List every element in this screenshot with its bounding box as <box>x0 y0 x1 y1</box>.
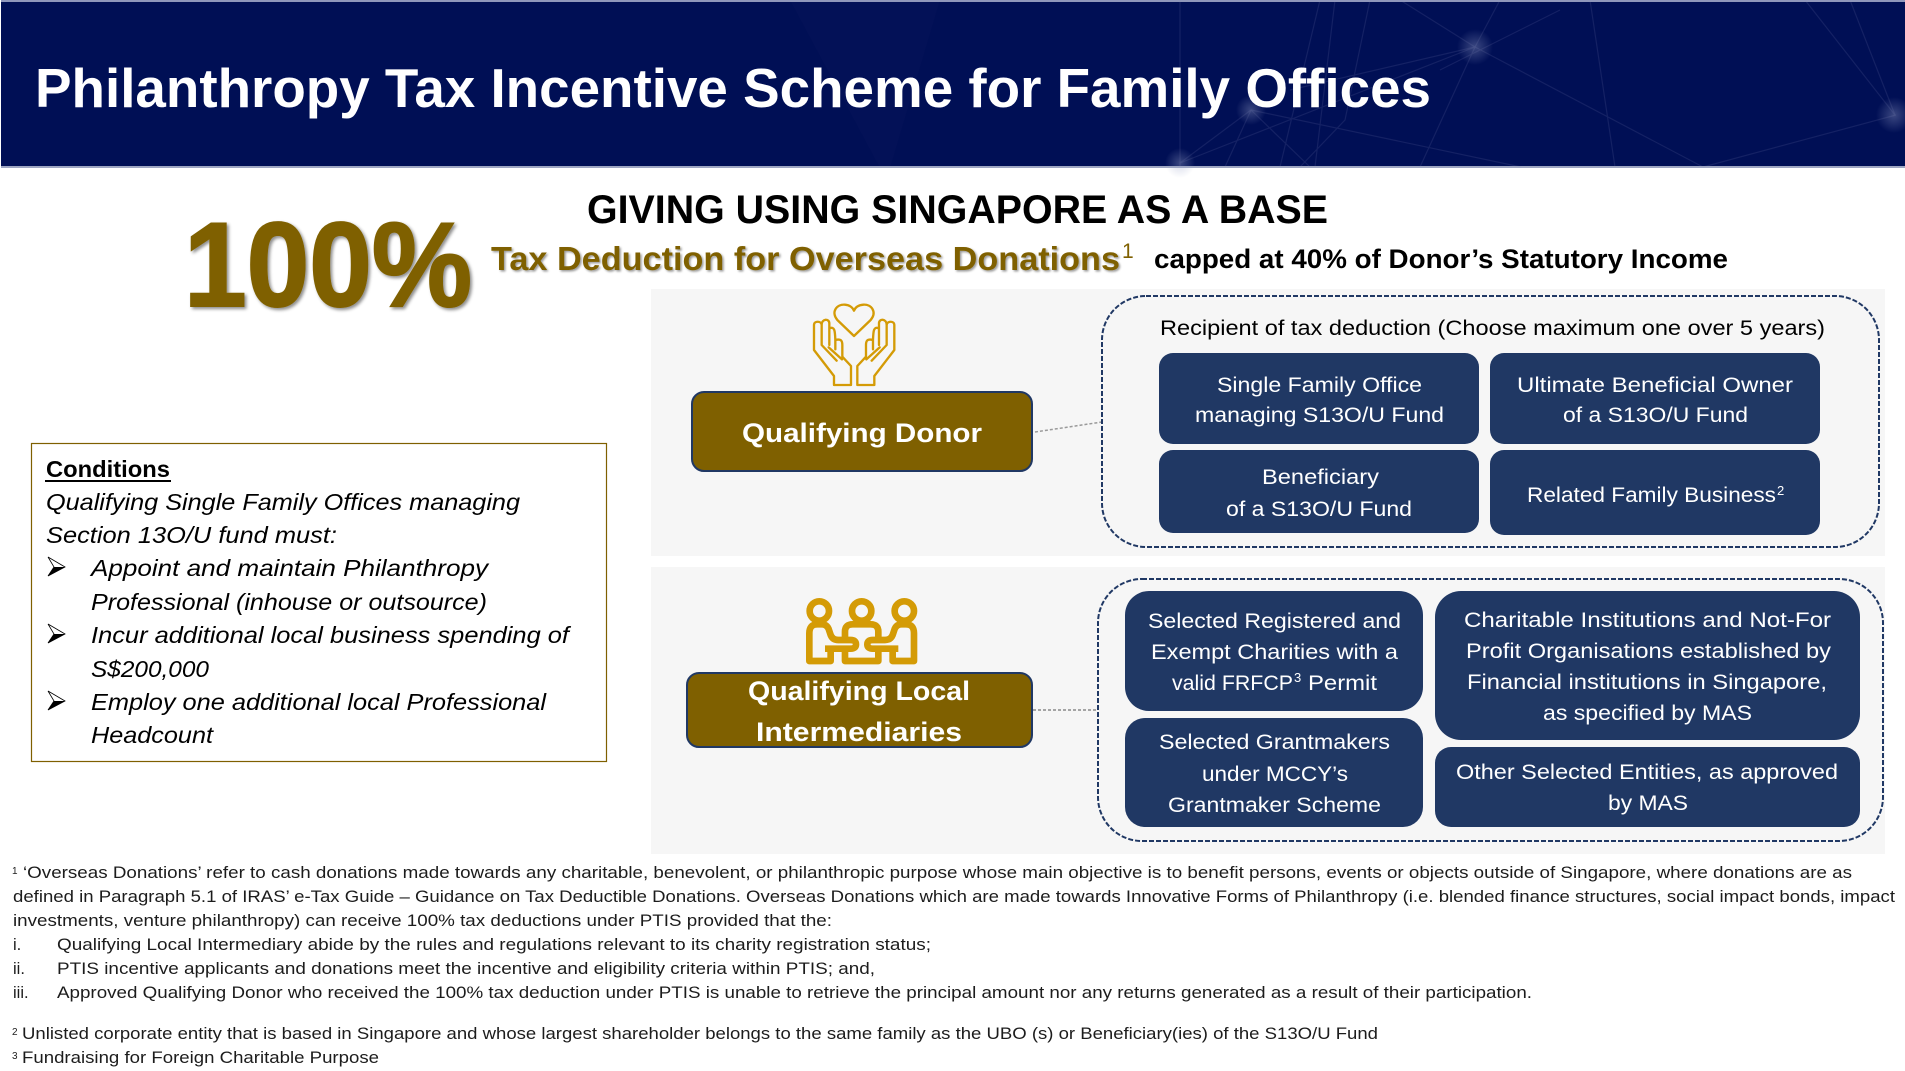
big number: 100%: 100% <box>184 198 472 332</box>
footnote 1: ‘Overseas Donations’ refer to cash donations made towards any charitable, benevolent, or philanthropic purpose whose main objective is to benefit persons, events or objects outside of Singapore, where donations are as <box>23 864 1852 882</box>
footnote 1: Qualifying Local Intermediary abide by the rules and regulations relevant to its charity registration status; <box>57 936 931 954</box>
box: beneficiary: of a S13O/U Fund <box>1226 498 1412 521</box>
box: related family business: Related Family Business <box>1527 484 1776 507</box>
box: single family office: managing S13O/U Fund <box>1195 404 1444 427</box>
box: selected grantmakers: under MCCY’s <box>1202 763 1348 786</box>
label: qualifying local intermediaries: Qualifying Local <box>748 676 970 706</box>
box: ultimate beneficial owner: of a S13O/U Fund <box>1563 404 1748 427</box>
box: related family business: 2 <box>1777 483 1784 498</box>
box: other selected entities: by MAS <box>1608 792 1688 815</box>
footnote 1: Approved Qualifying Donor who received the 100% tax deduction under PTIS is unable to retrieve the principal amount nor any returns generated as a result of their participation. <box>57 984 1532 1002</box>
subheading: tax deduction: Tax Deduction for Overseas Donations <box>491 240 1120 277</box>
footnote 1: investments, venture philanthropy) can receive 100% tax deductions under PTIS provided that the: <box>13 912 832 930</box>
box: registered and exempt charities: Permit <box>1308 672 1377 695</box>
condition: local business spending <box>48 622 572 682</box>
box: registered and exempt charities: 3 <box>1294 670 1301 685</box>
box: ultimate beneficial owner <box>1490 353 1820 444</box>
panel: qualifying local intermediaries <box>651 567 1885 854</box>
text: recipient heading: Recipient of tax deduction (Choose maximum one over 5 years) <box>1160 317 1825 340</box>
heading: conditions: Conditions <box>46 456 170 482</box>
condition: local professional headcount <box>48 689 547 748</box>
condition: local business spending: Incur additional local business spending of <box>91 622 572 648</box>
condition: philanthropy professional: Appoint and maintain Philanthropy <box>89 555 490 581</box>
footnote 1: i. <box>13 936 21 954</box>
condition: local business spending: S$200,000 <box>91 656 209 682</box>
box: beneficiary <box>1159 450 1479 533</box>
subheading: cap: capped at 40% of Donor’s Statutory Income <box>1154 244 1728 274</box>
box: registered and exempt charities: valid FRFCP <box>1172 672 1293 695</box>
title: Philanthropy Tax Incentive Scheme for Family Offices <box>35 57 1431 119</box>
label: qualifying local intermediaries <box>687 673 1032 747</box>
text: conditions intro: Section 13O/U fund must: <box>46 522 337 548</box>
box: registered and exempt charities: Exempt Charities with a <box>1151 641 1398 664</box>
text: conditions intro <box>46 489 520 548</box>
box: ultimate beneficial owner: Ultimate Beneficial Owner <box>1517 374 1793 397</box>
group: recipients of tax deduction <box>1102 296 1879 547</box>
footnote 1: defined in Paragraph 5.1 of IRAS’ e-Tax Guide – Guidance on Tax Deductible Donations. Overseas Donations which are made towards Innovative Forms of Philanthropy (i.e. blended finance structures, social impact bonds, impact <box>13 888 1895 906</box>
condition: local professional headcount: Employ one additional local Professional <box>91 689 547 715</box>
icon: hands holding heart <box>814 305 894 385</box>
box: registered and exempt charities: Selected Registered and <box>1148 610 1401 633</box>
box: charitable institutions: Financial institutions in Singapore, <box>1467 671 1827 694</box>
box: selected grantmakers: Selected Grantmakers <box>1159 731 1390 754</box>
box: selected grantmakers <box>1125 718 1423 827</box>
footnote 2: 2 <box>12 1027 18 1038</box>
box: registered and exempt charities <box>1125 591 1423 711</box>
footnote 1 <box>12 864 1895 1002</box>
panel: qualifying donor <box>651 289 1885 556</box>
box: related family business <box>1490 450 1820 535</box>
footnote 1: PTIS incentive applicants and donations meet the incentive and eligibility criteria within PTIS; and, <box>57 960 875 978</box>
label: qualifying donor: Qualifying Donor <box>742 418 983 448</box>
footnote 1: 1 <box>12 866 18 877</box>
connector: intermediaries to entities <box>1033 709 1098 711</box>
condition: philanthropy professional <box>48 555 490 615</box>
footnote 1: ii. <box>13 960 25 978</box>
text: conditions intro: Qualifying Single Family Offices managing <box>46 489 520 515</box>
box: charitable institutions <box>1435 591 1860 740</box>
header banner <box>0 0 1905 178</box>
connector: donor to recipients <box>1035 422 1102 432</box>
footnote 3: 3 <box>12 1051 18 1062</box>
footnote 2: Unlisted corporate entity that is based in Singapore and whose largest shareholder belongs to the same family as the UBO (s) or Beneficiary(ies) of the S13O/U Fund <box>22 1025 1378 1043</box>
box: single family office: Single Family Office <box>1217 374 1422 397</box>
footnote 3: Fundraising for Foreign Charitable Purpose <box>22 1049 379 1067</box>
box: selected grantmakers: Grantmaker Scheme <box>1168 794 1381 817</box>
footnote 1: iii. <box>13 984 29 1002</box>
box: charitable institutions: Charitable Institutions and Not-For <box>1464 609 1831 632</box>
box: charitable institutions: Profit Organisations established by <box>1466 640 1832 663</box>
box: charitable institutions: as specified by MAS <box>1543 702 1752 725</box>
condition: philanthropy professional: Professional (inhouse or outsource) <box>91 589 487 615</box>
box: other selected entities <box>1435 747 1860 827</box>
group: eligible intermediaries <box>1098 579 1883 841</box>
label: qualifying local intermediaries: Intermediaries <box>756 717 962 747</box>
subheading: tax deduction: 1 <box>1122 240 1134 263</box>
condition: local professional headcount: Headcount <box>91 722 215 748</box>
panel: conditions <box>32 444 606 762</box>
box: beneficiary: Beneficiary <box>1262 466 1380 489</box>
box: single family office <box>1159 353 1479 444</box>
box: other selected entities: Other Selected Entities, as approved <box>1456 761 1838 784</box>
label: qualifying donor <box>692 392 1032 471</box>
heading: giving using Singapore: GIVING USING SINGAPORE AS A BASE <box>587 188 1328 232</box>
icon: three people <box>809 601 914 661</box>
